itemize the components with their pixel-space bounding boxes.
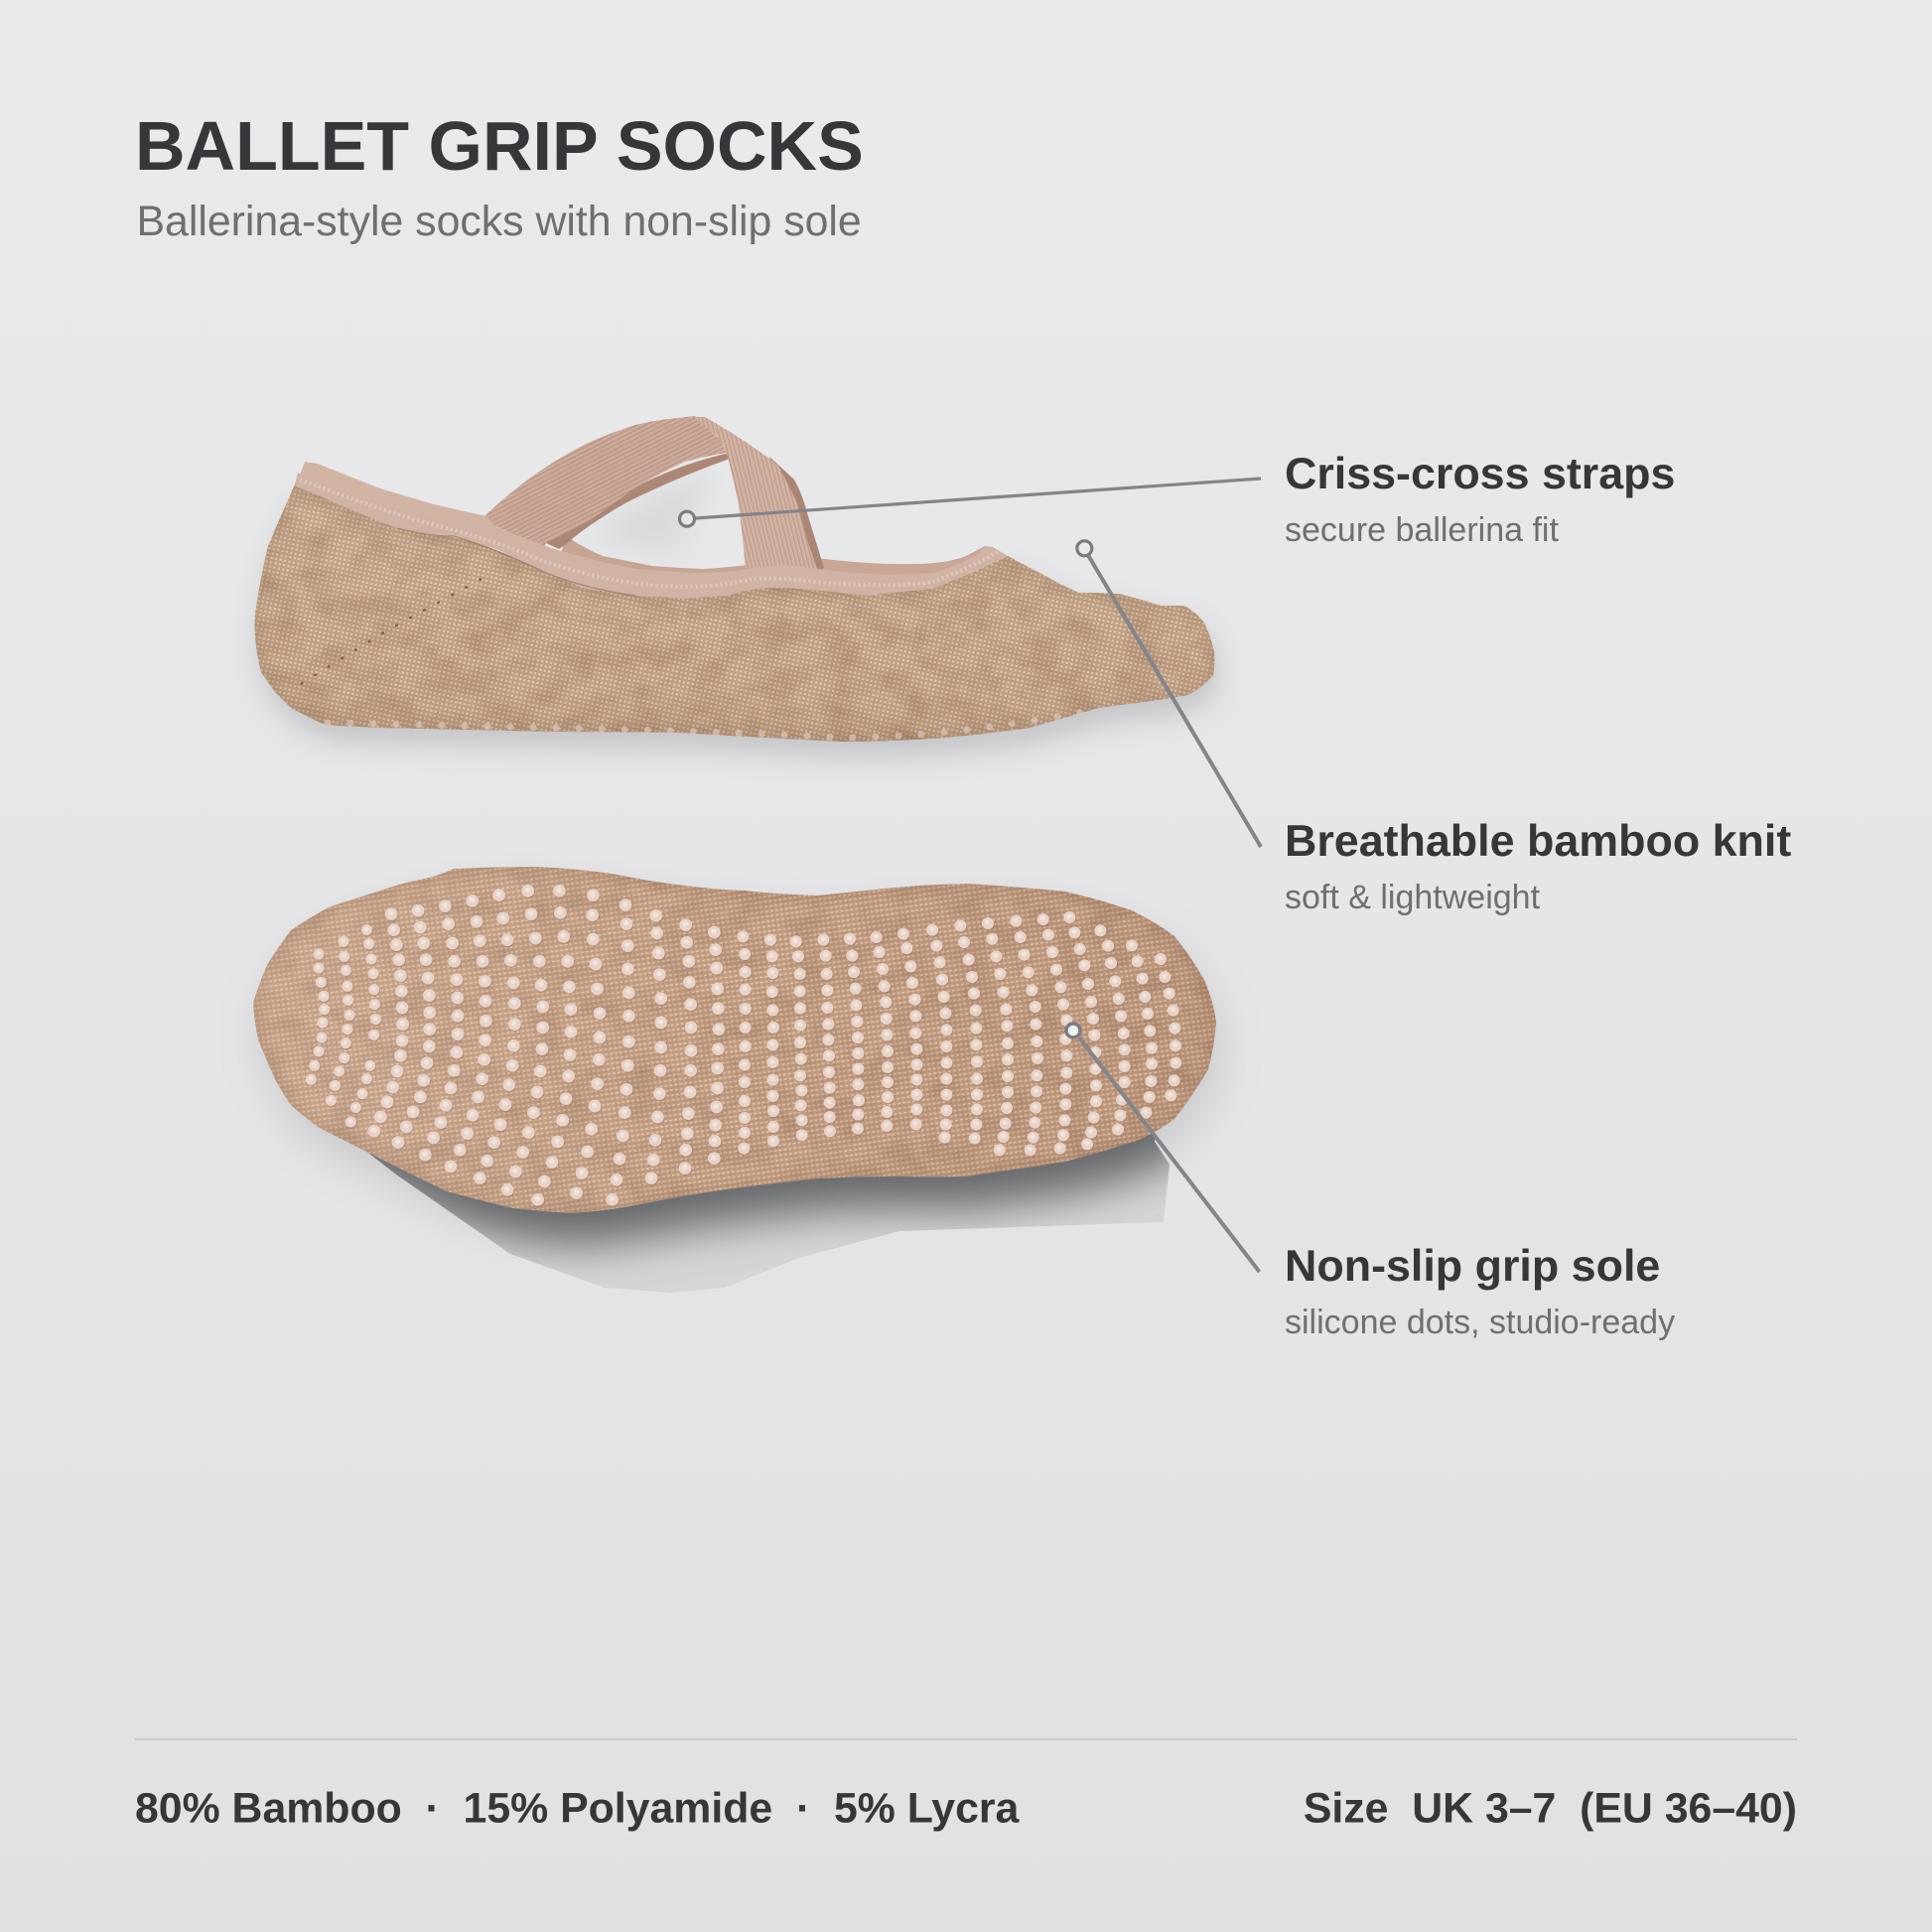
body tone overlay — [255, 484, 1214, 742]
label note: soft & lightweight — [1285, 879, 1541, 916]
grip dot highlights — [311, 890, 1175, 1198]
illustration: side view of sock — [255, 416, 1218, 758]
subtitle: Ballerina-style socks with non-slip sole — [137, 198, 862, 245]
callout: bamboo knit — [1077, 541, 1791, 916]
rear collar band — [296, 462, 506, 541]
strap dark edge — [769, 457, 824, 581]
body edge shading — [255, 484, 1214, 742]
side sock soft shadow — [259, 500, 1218, 758]
grip dot shadows — [312, 893, 1176, 1201]
knit body — [255, 484, 1214, 742]
infographic canvas — [135, 121, 1797, 1831]
label heading: Breathable bamboo knit — [1285, 816, 1791, 866]
callout: grip sole — [1066, 1024, 1675, 1341]
grip dots along the sole edge — [328, 712, 1082, 738]
illustration: sole view of sock — [253, 867, 1226, 1311]
label heading: Non-slip grip sole — [1285, 1241, 1660, 1291]
silicone grip dots — [311, 891, 1175, 1199]
sole soft shadow — [259, 887, 1222, 1233]
sole edge shading — [253, 867, 1216, 1213]
leader line — [695, 479, 1261, 518]
rear strap layered underside — [546, 453, 730, 549]
inner collar seen through the opening — [556, 536, 755, 586]
leader line — [1079, 1037, 1259, 1272]
footer: sizing: Size UK 3–7 (EU 36–40) — [1304, 1785, 1797, 1833]
knit sole — [253, 867, 1216, 1213]
label note: secure ballerina fit — [1285, 511, 1559, 549]
label heading: Criss-cross straps — [1285, 449, 1675, 498]
anchor dot — [1066, 1024, 1080, 1037]
label note: silicone dots, studio-ready — [1285, 1304, 1675, 1341]
anchor dot — [1077, 541, 1092, 556]
shadow inside the strap opening — [586, 467, 715, 556]
collar lower seam — [397, 528, 635, 596]
anchor dot — [679, 511, 695, 526]
sole tone overlay — [253, 867, 1216, 1213]
hard-edged cast shadow — [367, 1132, 1170, 1293]
footer: composition: 80% Bamboo · 15% Polyamide · 5% Lycra — [135, 1785, 1021, 1833]
strap going to heel — [475, 416, 733, 561]
collar stitching — [300, 480, 998, 587]
leader line — [1088, 556, 1261, 847]
heel seam — [291, 579, 482, 690]
title: BALLET GRIP SOCKS — [135, 107, 864, 185]
crossing strap — [692, 417, 821, 581]
inner collar toward the toe — [809, 546, 985, 582]
collar trim — [295, 473, 1008, 599]
callout: criss-cross straps — [679, 449, 1675, 549]
